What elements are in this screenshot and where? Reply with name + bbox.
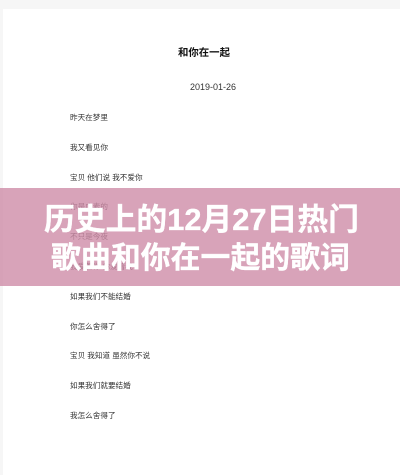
banner title line 2: 歌曲和你在一起的歌词	[51, 242, 350, 275]
lyrics lines: 宝贝 他们说 我不爱你	[70, 173, 143, 182]
pink title banner	[0, 188, 400, 286]
lyrics lines: 如果我们就要结婚	[70, 381, 131, 390]
lyrics lines: 不只是今夜	[70, 232, 108, 241]
lyrics lines: 你是广素的	[70, 202, 108, 211]
lyrics lines: 我爱着你 你爱着我	[70, 262, 133, 271]
lyrics lines: 昨天在梦里	[70, 113, 108, 122]
document heading: 和你在一起	[178, 48, 230, 59]
lyrics lines: 我怎么舍得了	[70, 411, 116, 420]
lyrics lines: 我又看见你	[70, 143, 108, 152]
document date: 2019-01-26	[190, 82, 236, 92]
lyrics lines: 你怎么舍得了	[70, 322, 116, 331]
banner title line 1: 历史上的12月27日热门	[44, 202, 359, 237]
lyrics lines: 如果我们不能结婚	[70, 292, 131, 301]
lyrics lines: 宝贝 我知道 虽然你不说	[70, 351, 150, 360]
